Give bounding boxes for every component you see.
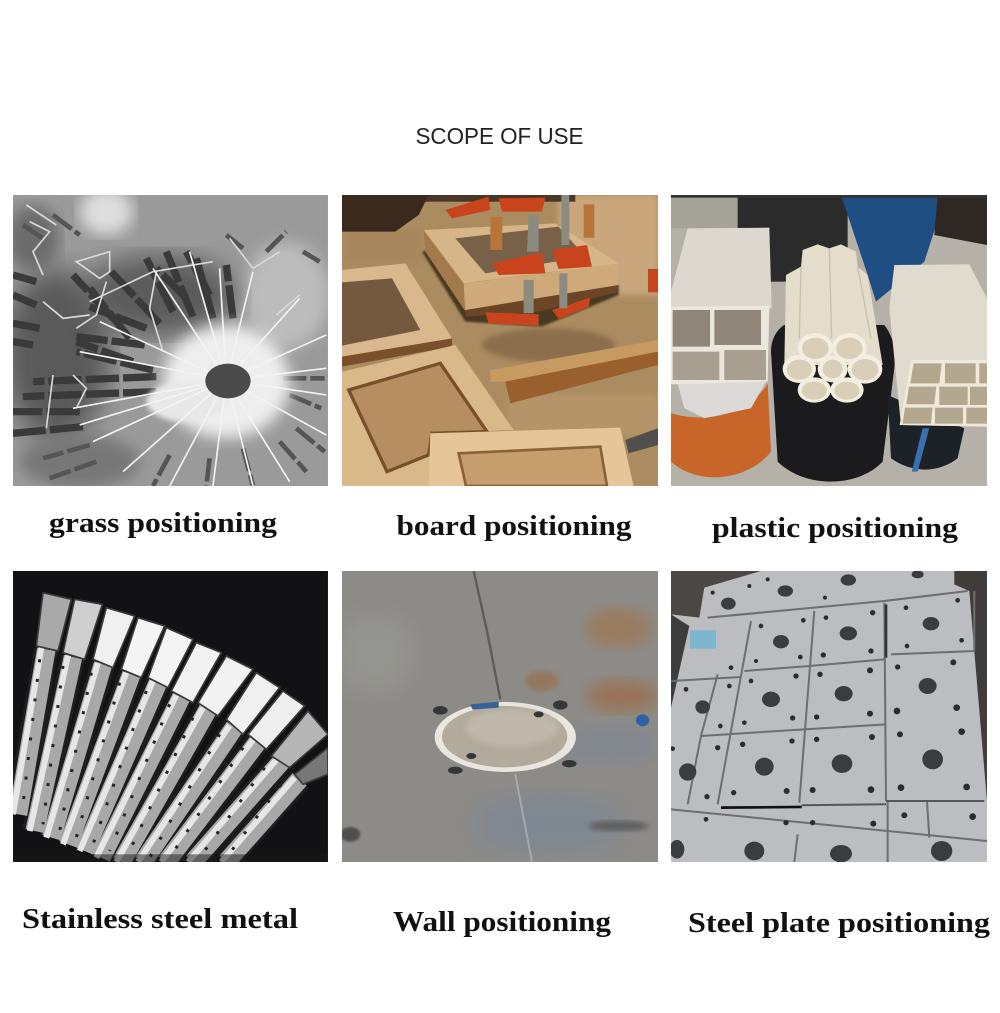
panel: steel plates photo [670,570,987,862]
panel: plastic pipes photo [671,195,987,486]
black pipe center [771,325,895,482]
radial dark shards [13,252,233,433]
beam [490,340,658,382]
cross cracks [26,205,300,428]
front door [429,428,634,486]
caption: plastic positioning: plastic positioning [712,513,958,544]
seven-hole tube [784,244,883,365]
panel: stainless steel clips photo [13,571,328,862]
upper left door [342,338,452,367]
panel: wood board photo [342,195,658,486]
white duct right [889,264,987,427]
clamped frame [424,230,466,312]
clip heads [36,593,328,784]
caption: stainless steel metal: Stainless steel metal [22,904,298,935]
white duct left [671,228,772,308]
caption: wall positioning: Wall positioning [393,907,611,938]
orange pipe [671,383,771,477]
panel: glass photo [3,188,330,488]
panel: wall hole photo [335,571,659,862]
caption: board positioning: board positioning [396,511,632,542]
bright burst [163,325,290,438]
caption: grass positioning: grass positioning [49,508,277,539]
lower left door [342,345,514,486]
tool [625,428,658,453]
impact hole [205,364,251,398]
clamps [445,197,592,326]
caption: steel plate positioning: Steel plate positioning [688,908,990,939]
sealed round hole [435,702,576,772]
title: SCOPE OF USE [416,123,584,149]
black pipe right [888,395,964,470]
